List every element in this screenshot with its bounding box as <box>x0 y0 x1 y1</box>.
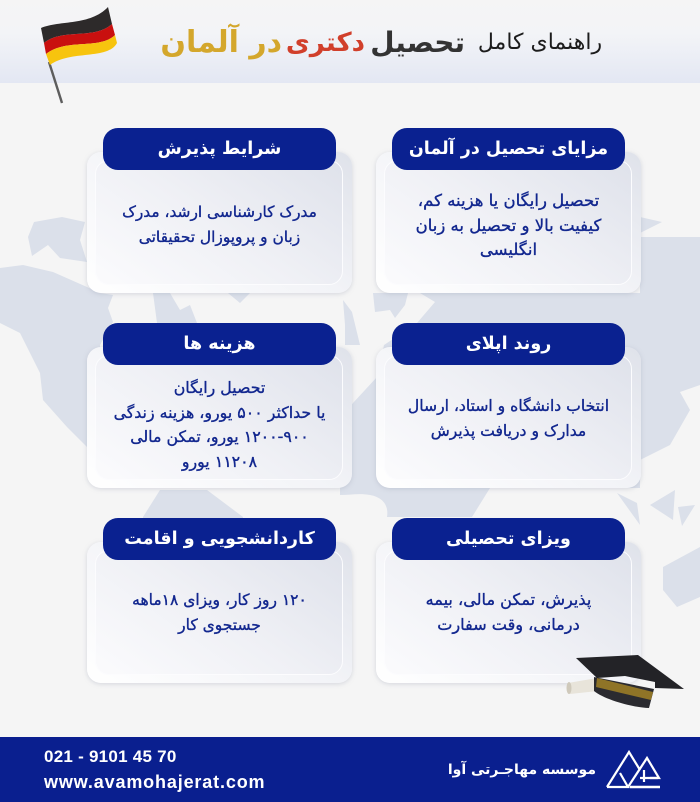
heading: process: روند اپلای <box>466 334 551 354</box>
panel: application process <box>374 323 643 491</box>
footer contact <box>44 747 265 792</box>
text: process: مدارک و دریافت پذیرش <box>431 422 586 440</box>
heading: requirements <box>103 128 336 170</box>
text: visa: پذیرش، تمکن مالی، بیمه <box>426 590 591 609</box>
text: requirements: مدرک کارشناسی ارشد، مدرک <box>122 203 317 221</box>
text: requirements: زبان و پروپوزال تحقیقاتی <box>139 228 300 246</box>
heading: work and residence: کاردانشجویی و اقامت <box>124 529 315 549</box>
heading: costs: هزینه ها <box>183 334 256 354</box>
text: costs <box>114 378 326 472</box>
text: work and residence: جستجوی کار <box>178 616 261 634</box>
text: benefits: کیفیت بالا و تحصیل به زبان <box>416 216 601 234</box>
panel: study visa <box>374 518 643 686</box>
text: visa: درمانی، وقت سفارت <box>437 614 580 634</box>
heading: visa <box>392 518 625 560</box>
heading: costs <box>103 323 336 365</box>
text: process <box>408 396 609 440</box>
footer institute name: موسسه مهاجـرتی آوا <box>448 762 596 778</box>
text: costs: ۱۱۲۰۸ یورو <box>182 452 257 470</box>
phone number: 021 - 9101 45 70 <box>44 747 177 766</box>
text: benefits: تحصیل رایگان یا هزینه کم، <box>418 191 599 210</box>
icon: German flag <box>41 7 117 104</box>
heading: work and residence <box>103 518 336 560</box>
panel: student work and residence <box>85 518 354 686</box>
panel: admission requirements <box>85 128 354 296</box>
panel: benefits of studying in Germany <box>374 128 643 296</box>
title part: doctorate: دکتری <box>286 28 365 58</box>
title part: doctoral study: تحصیل <box>370 26 465 59</box>
title part: in Germany: در آلمان <box>160 25 282 60</box>
text: benefits: انگلیسی <box>480 240 537 259</box>
website: www.avamohajerat.com <box>44 772 265 792</box>
header band <box>0 0 700 83</box>
footer band <box>0 737 700 802</box>
background world map <box>0 217 700 607</box>
text: work and residence: ۱۲۰ روز کار، ویزای ۱۸ماهه <box>132 591 307 609</box>
text: visa <box>426 590 591 634</box>
text: costs: تحصیل رایگان <box>174 378 265 397</box>
text: costs: یا حداکثر ۵۰۰ یورو، هزینه زندگی <box>114 402 325 422</box>
title <box>160 23 602 60</box>
icon: logo <box>606 750 661 788</box>
text: costs: ۱۲۰۰-۹۰۰ یورو، تمکن مالی <box>130 427 309 446</box>
text: process: انتخاب دانشگاه و استاد، ارسال <box>408 397 609 415</box>
heading: process <box>392 323 625 365</box>
heading: requirements: شرایط پذیرش <box>158 139 281 159</box>
heading: benefits <box>392 128 625 170</box>
icon: graduation cap <box>566 655 684 708</box>
title part: intro: راهنمای کامل <box>478 30 602 55</box>
heading: visa: ویزای تحصیلی <box>446 529 571 549</box>
heading: benefits: مزایای تحصیل در آلمان <box>409 139 608 159</box>
panel: costs <box>85 323 354 491</box>
text: benefits <box>416 191 602 259</box>
text: requirements <box>122 203 317 246</box>
text: work and residence <box>132 591 307 634</box>
